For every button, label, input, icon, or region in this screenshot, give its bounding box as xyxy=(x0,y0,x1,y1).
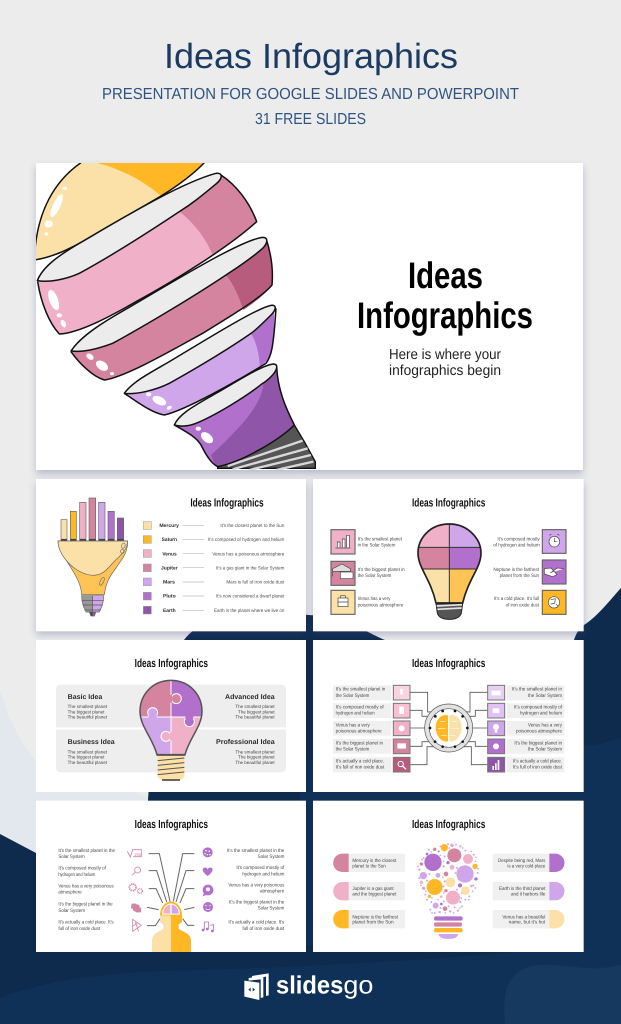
right pills: Earth is the third planet xyxy=(499,886,546,891)
right descriptions: Venus has a very poisonous xyxy=(228,882,284,888)
left descriptions: It's composed mostly of xyxy=(336,704,384,710)
right pills: is a very cold place xyxy=(507,863,545,869)
wordmark: go xyxy=(343,971,373,999)
panel: funnel bulb bar slide xyxy=(36,479,306,631)
left pills xyxy=(333,854,405,928)
left descriptions: in the Solar System xyxy=(358,542,395,548)
logo: slidesgo xyxy=(244,971,373,1000)
icon: stacked slides xyxy=(244,973,269,1000)
left descriptions: It's the smallest planet in the xyxy=(58,848,115,853)
puzzle bulb xyxy=(136,678,204,781)
connectors xyxy=(410,692,488,765)
idea: business: The beautiful planet xyxy=(68,760,107,765)
right descriptions: hydrogen and helium xyxy=(242,871,284,877)
heading: Ideas Infographics xyxy=(135,818,208,831)
right icon squares xyxy=(488,685,505,772)
right descriptions: full of iron oxide dust xyxy=(242,926,285,931)
left descriptions xyxy=(336,686,385,770)
left descriptions: It's the biggest planet in xyxy=(358,567,405,572)
left pills: Neptune is the farthest xyxy=(352,914,398,920)
idea: advanced: Advanced Idea xyxy=(225,693,275,701)
left descriptions: Venus has a very xyxy=(358,596,390,601)
idea: professional: The biggest planet xyxy=(238,754,275,760)
quadrant bulb xyxy=(417,523,482,620)
left descriptions: It's actually a cold place. It's xyxy=(58,919,114,925)
left pills: planet to the Sun xyxy=(352,863,386,869)
right descriptions xyxy=(512,686,562,770)
left descriptions xyxy=(358,536,405,608)
idea: business: Business Idea xyxy=(68,738,115,746)
heading: Ideas Infographics xyxy=(190,496,264,509)
heading: Ideas Infographics xyxy=(412,818,485,831)
left descriptions xyxy=(58,848,115,931)
idea: advanced: The biggest planet xyxy=(238,709,275,714)
idea: professional: Professional Idea xyxy=(216,738,275,746)
right pills: Venus has a beautiful xyxy=(502,914,545,920)
legend: Venus xyxy=(162,551,177,557)
left icon squares xyxy=(393,685,410,772)
left descriptions: the Solar System xyxy=(336,746,369,752)
idea: professional: The beautiful planet xyxy=(235,760,275,765)
idea: professional xyxy=(216,738,275,765)
cover subheading: Here is where your xyxy=(389,347,501,363)
legend: Mars is full of iron oxide dust xyxy=(226,580,284,585)
panel: brain diagram slide xyxy=(313,640,584,792)
legend: It's now considered a dwarf planet xyxy=(216,594,284,599)
right descriptions: It's composed mostly of xyxy=(236,865,285,870)
idea: basic: The beautiful planet xyxy=(68,714,107,720)
legend: Saturn xyxy=(162,537,177,542)
cover subheading xyxy=(389,347,501,379)
right pills xyxy=(493,854,564,928)
illustration: sliced light bulb xyxy=(34,163,315,470)
bulb with bars xyxy=(58,498,128,616)
left descriptions: It's the biggest planet in the xyxy=(58,901,113,907)
right descriptions: of hydrogen and helium xyxy=(493,542,540,548)
wordmark: slides xyxy=(276,971,343,999)
heading: Ideas Infographics xyxy=(412,496,485,509)
right descriptions: Solar System xyxy=(258,854,284,859)
right pills: Despite being red, Mars xyxy=(498,858,545,863)
head figure xyxy=(152,901,191,952)
panel: cover slide xyxy=(34,163,583,470)
left descriptions: poisonous atmosphere xyxy=(336,728,382,734)
connector lines xyxy=(147,854,194,926)
left pills: planet from the Sun xyxy=(352,919,394,925)
left descriptions: Solar System xyxy=(58,854,85,859)
cover heading xyxy=(357,255,533,336)
legend: Venus has a poisonous atmosphere xyxy=(212,551,284,557)
legend: Pluto xyxy=(163,593,176,599)
right pills: and it harbors life xyxy=(511,891,545,897)
legend: Earth xyxy=(163,608,176,613)
cover subheading: infographics begin xyxy=(389,363,501,379)
left descriptions: It's the smallest planet xyxy=(358,536,402,542)
idea: advanced: The smallest planet xyxy=(235,704,275,709)
idea: basic: The biggest planet xyxy=(68,709,104,714)
left descriptions: Venus has a very poisonous xyxy=(58,883,114,889)
idea: advanced xyxy=(225,693,275,720)
left descriptions: the Solar System xyxy=(358,573,391,578)
right descriptions: It's the smallest planet in the xyxy=(227,848,284,853)
left descriptions: It's actually a cold place. xyxy=(336,758,384,764)
legend: Mars xyxy=(163,579,175,585)
right descriptions: the Solar System xyxy=(528,746,562,752)
panel: quadrant bulb slide xyxy=(313,479,584,631)
idea: basic: The smallest planet xyxy=(68,704,107,709)
left pills: Jupiter is a gas giant xyxy=(352,886,394,891)
right descriptions: hydrogen and helium xyxy=(520,710,562,716)
idea: advanced: The beautiful planet xyxy=(235,714,275,720)
right icons xyxy=(202,847,214,932)
cover heading: Infographics xyxy=(357,295,533,336)
left descriptions: hydrogen and helium xyxy=(58,872,95,877)
left pills: and the biggest planet xyxy=(352,891,397,897)
left icons xyxy=(127,850,142,931)
idea: business: The smallest planet xyxy=(68,749,107,754)
right descriptions: It's composed mostly of xyxy=(514,704,562,710)
legend: Earth is the planet where we live on xyxy=(214,608,284,613)
brain circle xyxy=(425,704,473,752)
right descriptions xyxy=(493,536,540,608)
left descriptions: Solar System xyxy=(58,908,85,913)
idea: business xyxy=(68,738,115,765)
left descriptions: the Solar System xyxy=(336,693,369,698)
left descriptions: hydrogen and helium xyxy=(336,710,375,716)
left icons: 256 xyxy=(134,852,141,857)
right pills: name, but it's hot xyxy=(509,919,546,925)
panel: head diagram slide xyxy=(36,801,306,952)
right descriptions xyxy=(227,848,285,931)
panel: bubble bulb slide xyxy=(313,801,584,952)
left descriptions: It's the smallest planet in xyxy=(336,686,385,692)
icon boxes xyxy=(331,530,566,614)
legend xyxy=(143,522,284,614)
left descriptions: It's the biggest planet in xyxy=(336,740,383,746)
idea: business: The biggest planet xyxy=(68,754,104,760)
idea: basic: Basic Idea xyxy=(68,693,102,701)
legend: It's the closest planet to the Sun xyxy=(220,523,284,528)
left descriptions: atmosphere xyxy=(58,889,82,895)
right descriptions: Neptune is the farthest xyxy=(493,567,539,572)
right descriptions: the Solar System xyxy=(528,693,562,698)
right descriptions: poisonous atmosphere xyxy=(516,728,562,734)
text backgrounds xyxy=(333,685,564,772)
right descriptions: It's actually a cold place. xyxy=(513,758,562,764)
panel: puzzle bulb slide xyxy=(36,640,306,792)
right descriptions: Venus has a very xyxy=(528,722,562,728)
heading: Ideas Infographics xyxy=(135,657,208,670)
right descriptions: atmosphere xyxy=(260,888,284,894)
left descriptions: It's full of iron oxide dust xyxy=(336,764,385,770)
legend: Mercury xyxy=(159,523,179,528)
slide count: 31 FREE SLIDES xyxy=(255,111,366,128)
bubble bulb xyxy=(417,843,479,939)
idea: professional: The smallest planet xyxy=(235,749,275,754)
left descriptions: poisonous atmosphere xyxy=(358,602,403,608)
heading: Ideas Infographics xyxy=(412,657,485,670)
legend: It's a gas giant in the Solar System xyxy=(216,565,284,571)
left pills: Mercury is the closest xyxy=(352,858,397,863)
left descriptions: Venus has a very xyxy=(336,722,370,728)
left descriptions: full of iron oxide dust xyxy=(58,926,100,931)
cover heading: Ideas xyxy=(408,255,483,296)
title: Ideas Infographics xyxy=(164,37,458,76)
subtitle: PRESENTATION FOR GOOGLE SLIDES AND POWERPOINT xyxy=(102,86,519,103)
slide shadows xyxy=(36,167,584,635)
right descriptions: It's full of iron oxide dust xyxy=(513,764,562,770)
right descriptions: It's the smallest planet in xyxy=(512,686,562,692)
right descriptions: It's actually a cold place. It's xyxy=(228,919,284,925)
legend: Jupiter xyxy=(161,565,178,571)
right descriptions: of iron oxide dust xyxy=(506,602,539,608)
right descriptions: It's the biggest planet in xyxy=(514,740,562,746)
right descriptions: Solar System xyxy=(258,905,284,911)
idea panels xyxy=(56,685,286,772)
right descriptions: It's the biggest planet in the xyxy=(229,899,284,905)
right descriptions: It's a cold place. It's full xyxy=(494,596,539,601)
left descriptions: It's composed mostly of xyxy=(58,865,106,871)
legend: It's composed of hydrogen and helium xyxy=(208,537,284,542)
right descriptions: planet from the Sun xyxy=(500,573,539,578)
right descriptions: It's composed mostly xyxy=(497,536,540,542)
idea: basic xyxy=(68,693,107,720)
